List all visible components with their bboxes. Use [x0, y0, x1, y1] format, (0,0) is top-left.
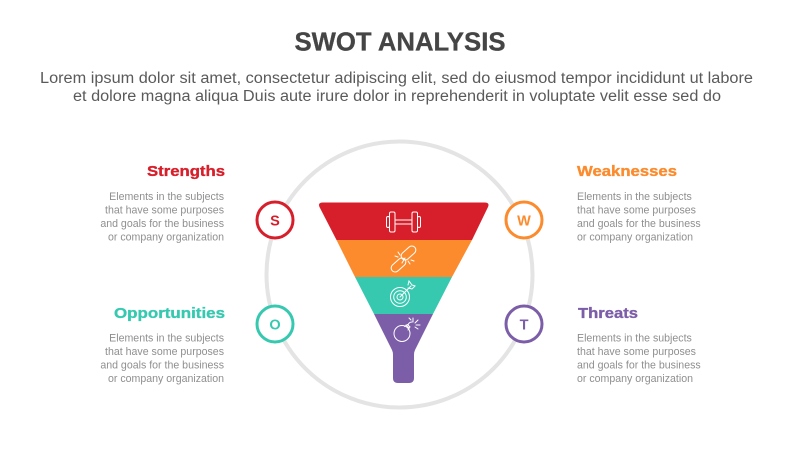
badge: O: O	[269, 318, 281, 334]
icon: dumbbell	[386, 212, 420, 232]
subtitle text: Lorem ipsum dolor sit amet, consectetur adipiscing elit, sed do eiusmod tempor incididunt ut labore	[40, 70, 753, 87]
badge: S: S	[270, 214, 280, 230]
icon: broken chain	[390, 244, 417, 274]
badge: T	[506, 306, 542, 342]
panel: strengths: that have some purposes	[105, 204, 224, 216]
panel: threats: or company organization	[577, 373, 693, 385]
panel: weaknesses	[577, 164, 701, 244]
panel: threats: and goals for the business	[577, 360, 701, 372]
subtitle text: et dolore magna aliqua Duis aute irure dolor in reprehenderit in voluptate velit esse sed do	[73, 88, 721, 105]
funnel band: strengths	[319, 202, 489, 240]
panel: threats: Elements in the subjects	[577, 332, 692, 344]
funnel band: threats	[374, 314, 433, 383]
panel: strengths: and goals for the business	[100, 218, 224, 230]
badge: W	[506, 202, 542, 238]
panel: weaknesses: that have some purposes	[577, 204, 696, 216]
panel: opportunities: that have some purposes	[105, 346, 224, 358]
panel: threats: that have some purposes	[577, 346, 696, 358]
funnel band: weaknesses	[336, 240, 472, 277]
panel: strengths	[100, 164, 225, 244]
badge: O	[257, 306, 293, 342]
panel: strengths: Elements in the subjects	[109, 191, 224, 203]
large background ring	[266, 142, 532, 408]
panel: strengths: or company organization	[108, 232, 224, 244]
panel: weaknesses: Elements in the subjects	[577, 191, 692, 203]
funnel	[319, 202, 489, 383]
badge: W: W	[517, 214, 531, 230]
panel: strengths: Strengths	[147, 164, 225, 180]
funnel band: opportunities	[355, 277, 452, 314]
panel: opportunities: and goals for the business	[100, 360, 224, 372]
panel: weaknesses: and goals for the business	[577, 218, 701, 230]
badge: T: T	[520, 318, 529, 334]
panel: opportunities: or company organization	[108, 373, 224, 385]
panel: opportunities	[100, 306, 225, 385]
panel: opportunities: Elements in the subjects	[109, 332, 224, 344]
panel: threats	[577, 306, 701, 385]
badge: S	[257, 202, 293, 238]
subtitle text	[40, 70, 753, 105]
panel: opportunities: Opportunities	[114, 306, 225, 322]
icon: target with arrow	[390, 281, 415, 306]
panel: threats: Threats	[578, 306, 638, 322]
panel: weaknesses: Weaknesses	[577, 164, 677, 180]
icon: bomb	[394, 318, 420, 342]
panel: weaknesses: or company organization	[577, 232, 693, 244]
title: SWOT ANALYSIS	[294, 28, 506, 56]
